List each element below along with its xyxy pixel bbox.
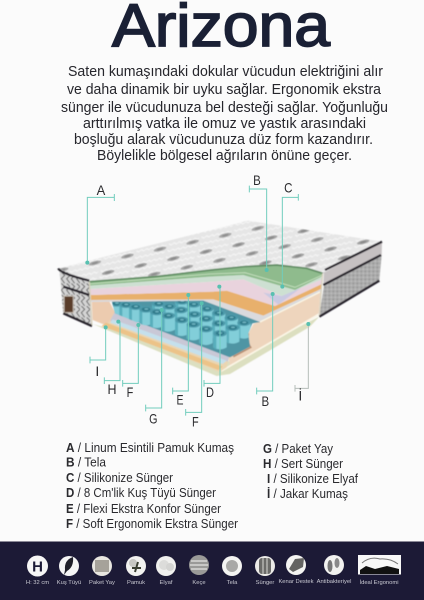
- footer labels: Pamuk: [127, 580, 145, 586]
- right side panel: [319, 255, 382, 316]
- front foam: [227, 291, 321, 366]
- icon: cotton: [126, 556, 146, 576]
- leader dots: [85, 261, 310, 329]
- footer labels: Tela: [227, 580, 238, 586]
- piping bands: [58, 242, 382, 326]
- cut edge trim: [89, 273, 323, 325]
- bottom layers under springs: [93, 312, 230, 372]
- layer letters: I: [95, 363, 99, 379]
- layer letters: F: [192, 414, 199, 430]
- legend left column: [66, 441, 238, 531]
- layer letters: B: [253, 172, 261, 188]
- mattress diagram: [58, 172, 382, 430]
- description paragraph: ve daha dinamik bir uyku sağlar. Ergonomik ekstra: [67, 82, 381, 98]
- pocket springs: [110, 298, 251, 349]
- icon: feather: [59, 556, 79, 576]
- legend right column: I / Silikonize Elyaf: [267, 472, 358, 486]
- mattress body: [58, 221, 382, 376]
- footer labels: Elyaf: [160, 580, 173, 586]
- bottom jacquard layer: [93, 317, 319, 376]
- legend left column: A / Linum Esintili Pamuk Kumaş: [66, 441, 234, 455]
- spring pocket background: [112, 299, 261, 357]
- layer letters: [95, 172, 302, 430]
- legend left column: C / Silikonize Sünger: [66, 471, 173, 485]
- description paragraph: sünger ile vücudunuza bel desteği sağlar. Yoğunluğu: [61, 100, 388, 116]
- legend right column: [263, 442, 358, 501]
- legend left column: B / Tela: [66, 456, 106, 470]
- icon: pocket spring: [92, 556, 112, 576]
- legend right column: H / Sert Sünger: [263, 457, 343, 471]
- footer labels: [26, 579, 398, 586]
- footer labels: İdeal Ergonomi: [360, 579, 398, 586]
- footer labels: Keçe: [192, 580, 206, 586]
- icon: edge support: [286, 555, 306, 575]
- footer icons: [27, 555, 401, 576]
- icon: fibre: [156, 556, 176, 576]
- layer letters: H: [107, 381, 116, 397]
- right side top strip: [323, 242, 382, 285]
- icon: fabric: [222, 556, 242, 576]
- footer labels: Sünger: [256, 580, 274, 586]
- layer letters: F: [127, 384, 133, 400]
- top quilted surface: [58, 221, 382, 282]
- foam layers over springs: [91, 289, 322, 322]
- layer letters: İ: [298, 386, 302, 403]
- left side panel: [59, 269, 92, 326]
- layer letters: D: [206, 384, 214, 400]
- footer labels: H: 32 cm: [26, 580, 49, 586]
- footer labels: Antibakteriyel: [317, 579, 351, 585]
- footer band: [0, 542, 424, 600]
- leader lines: [87, 186, 308, 416]
- icon: height: H: [32, 558, 43, 576]
- layer letters: B: [261, 393, 269, 409]
- footer labels: Kenar Destek: [278, 579, 314, 585]
- description paragraph: arttırılmış vatka ile omuz ve yastık arasındaki: [83, 116, 366, 132]
- icon: height: [27, 556, 48, 576]
- left side label: [64, 296, 73, 313]
- green top layer: [89, 265, 323, 290]
- layer letters: A: [97, 182, 106, 198]
- icon: ideal ergonomics: [358, 555, 401, 574]
- layer letters: G: [149, 410, 157, 426]
- legend left column: F / Soft Ergonomik Ekstra Sünger: [66, 517, 238, 531]
- footer labels: Paket Yay: [89, 580, 115, 586]
- description paragraph: Saten kumaşındaki dokular vücudun elektriğini alır: [68, 64, 383, 80]
- legend right column: İ / Jakar Kumaş: [267, 486, 348, 501]
- icon: antibacterial: [324, 555, 344, 575]
- description paragraph: boşluğu alarak vücudunuza düz form kazandırır.: [74, 132, 373, 148]
- legend left column: D / 8 Cm'lik Kuş Tüyü Sünger: [66, 486, 216, 500]
- legend right column: G / Paket Yay: [263, 442, 334, 456]
- layer letters: E: [176, 391, 183, 407]
- layer letters: C: [284, 180, 292, 196]
- description paragraph: Böylelikle bölgesel ağrıların önüne geçer.: [97, 148, 352, 164]
- description paragraph: [61, 64, 388, 164]
- footer labels: Kuş Tüyü: [57, 580, 81, 586]
- left foam block: [92, 301, 115, 325]
- icon: foam: [255, 556, 275, 576]
- icon: felt: [189, 555, 209, 575]
- legend left column: E / Flexi Ekstra Konfor Sünger: [66, 502, 221, 516]
